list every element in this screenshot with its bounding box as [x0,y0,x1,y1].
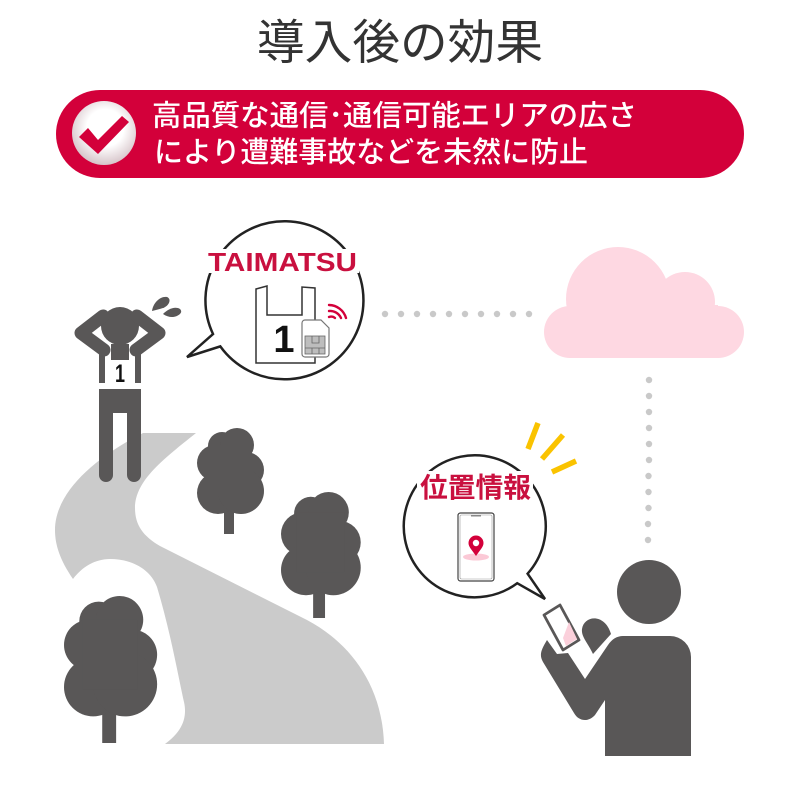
speech bubble: location [404,455,546,599]
tree 1 [197,428,264,534]
bag number: 1 [273,319,295,361]
alert rays [528,423,576,472]
cloud [544,247,744,358]
icon: signal waves [329,305,346,318]
connector dots: hiker to cloud [382,311,532,317]
person with smartphone [541,560,691,756]
hiker with hands on head [81,307,159,482]
icon: sweat drops [152,297,181,317]
bib number: 1 [115,360,125,388]
icon: handheld phone [544,605,579,650]
icon: phone with map pin [458,513,494,581]
brand label: TAIMATSU [208,247,357,277]
tree 2 [281,492,361,618]
tree 3 [64,596,157,743]
banner text [152,100,637,169]
icon: plastic bag [256,286,315,363]
banner text: により遭難事故などを未然に防止 [154,136,588,169]
banner [56,90,744,178]
banner text: 高品質な通信･通信可能エリアの広さ [152,100,637,132]
road [55,433,384,744]
title: 導入後の効果 [257,17,543,70]
icon: check mark [72,101,136,165]
connector dots: cloud to person [645,377,652,543]
icon: SIM card [302,320,329,357]
far hand [582,618,611,654]
speech bubble: TAIMATSU SIM [187,221,363,379]
location label: 位置情報 [420,472,532,503]
